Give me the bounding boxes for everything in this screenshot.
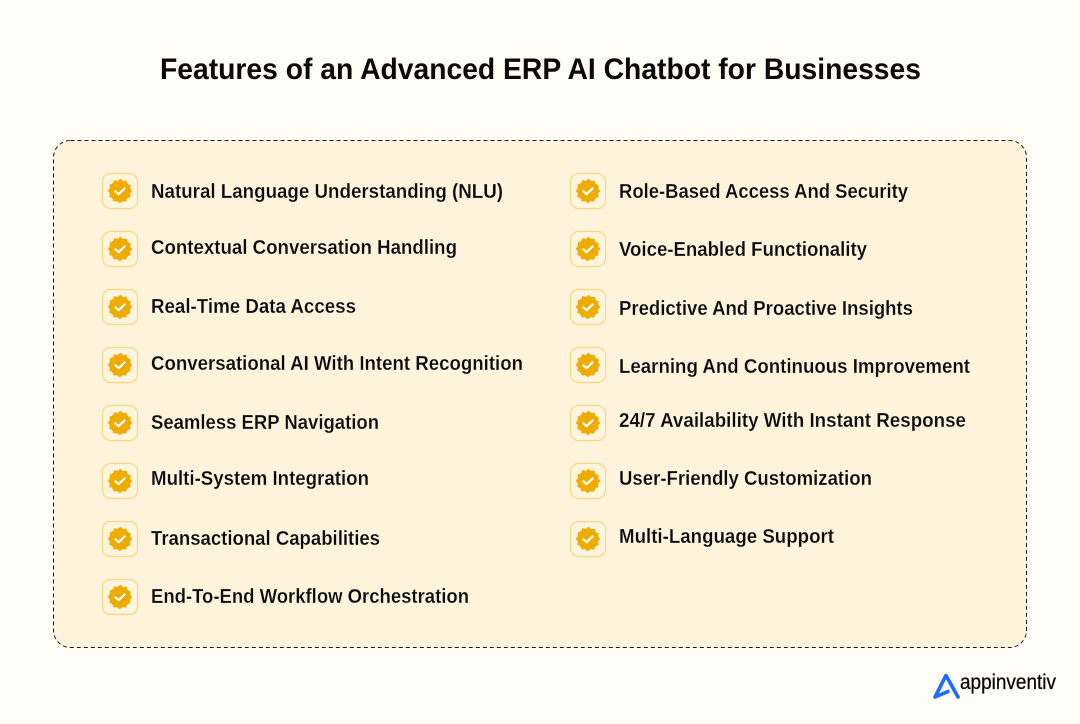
feature: Conversational AI With Intent Recognition — [102, 348, 523, 382]
feature: Multi-System Integration: Multi-System Integration — [151, 468, 369, 490]
feature: Multi-Language Support: Multi-Language Support — [619, 526, 834, 548]
feature: Transactional Capabilities: Transactional Capabilities — [151, 528, 380, 550]
logo wordmark: appinventiv — [960, 671, 1056, 694]
feature: Role-Based Access And Security: Role-Based Access And Security — [619, 181, 909, 203]
feature: Natural Language Understanding — [102, 174, 503, 208]
logo: appinventiv — [935, 671, 1056, 697]
feature: Voice-Enabled Functionality — [570, 232, 868, 266]
feature: 24/7 Availability With Instant Response — [570, 406, 966, 440]
feature: Learning And Continuous Improvement: Learning And Continuous Improvement — [619, 356, 970, 378]
feature: Real-Time Data Access — [102, 290, 356, 324]
feature: Seamless ERP Navigation — [102, 406, 379, 440]
feature: Voice-Enabled Functionality: Voice-Enabled Functionality — [619, 239, 868, 261]
icon: logo arrow — [935, 676, 958, 697]
feature: Predictive And Proactive Insights — [570, 290, 913, 324]
panel: features list — [54, 140, 1026, 648]
feature: Multi-System Integration — [102, 464, 369, 498]
feature: Real-Time Data Access: Real-Time Data Access — [151, 296, 356, 318]
feature: User-Friendly Customization: User-Friendly Customization — [619, 468, 872, 490]
feature: Predictive And Proactive Insights: Predictive And Proactive Insights — [619, 298, 913, 320]
feature: Role-Based Access And Security — [570, 174, 909, 208]
feature: Learning And Continuous Improvement — [570, 348, 970, 382]
feature: Contextual Conversation Handling — [102, 232, 457, 266]
feature: Natural Language Understanding: Natural Language Understanding (NLU) — [151, 181, 503, 203]
feature: Transactional Capabilities — [102, 522, 380, 556]
feature: Seamless ERP Navigation: Seamless ERP Navigation — [151, 412, 379, 434]
feature: End-To-End Workflow Orchestration — [102, 580, 469, 614]
feature: Contextual Conversation Handling: Contextual Conversation Handling — [151, 237, 457, 259]
title: Features of an Advanced ERP AI Chatbot for Businesses — [160, 53, 921, 86]
feature: User-Friendly Customization — [570, 464, 872, 498]
feature: Conversational AI With Intent Recognition: Conversational AI With Intent Recognition — [151, 353, 523, 375]
feature: 24/7 Availability With Instant Response: 24/7 Availability With Instant Response — [619, 410, 966, 432]
feature: Multi-Language Support — [570, 522, 834, 556]
feature: End-To-End Workflow Orchestration: End-To-End Workflow Orchestration — [151, 586, 469, 608]
